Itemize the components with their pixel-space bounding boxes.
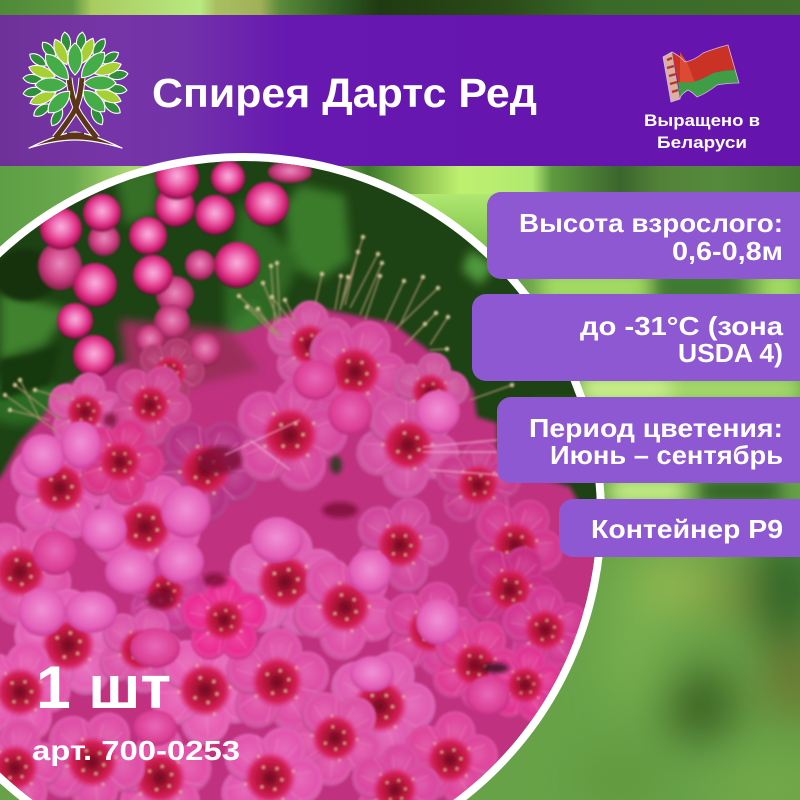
panel: flowering period: Июнь – сентябрь <box>550 440 783 470</box>
stamens <box>3 235 514 475</box>
panel: container: Контейнер Р9 <box>591 514 783 544</box>
article number: арт. 700-0253 <box>32 735 240 766</box>
buds cluster <box>38 156 312 377</box>
panel: frost hardiness <box>472 294 800 381</box>
green gap beside the circle <box>395 194 495 294</box>
open flowers <box>0 300 588 800</box>
header band <box>0 15 800 166</box>
panel: height: 0,6-0,8м <box>672 236 783 266</box>
photo circle: spirea flowers <box>0 150 610 800</box>
dark green foliage <box>0 150 610 800</box>
title: Спирея Дартс Ред <box>152 70 537 116</box>
logo: tree <box>22 31 129 148</box>
panel: flowering period: Период цветения: <box>529 413 783 443</box>
green strip under header <box>0 166 800 256</box>
tree trunk and ground <box>29 78 122 148</box>
panel: frost hardiness: до -31°С (зона <box>580 311 784 341</box>
dark gaps between flowers <box>103 413 509 673</box>
top green strip <box>0 0 800 16</box>
panel: height: Высота взрослого: <box>519 208 783 238</box>
panel: container <box>559 499 800 557</box>
pink flower mass base <box>0 307 610 800</box>
pale foreground petals <box>18 360 510 746</box>
flag caption: Выращено в <box>644 112 760 130</box>
quantity: 1 шт <box>36 654 171 721</box>
panel: frost hardiness: USDA 4) <box>678 338 783 368</box>
tree leaves <box>22 31 129 128</box>
panel: flowering period <box>497 397 800 483</box>
flag caption <box>644 112 760 152</box>
flag caption: Беларуси <box>657 134 747 152</box>
icon: Belarus flag <box>663 45 739 102</box>
panel: height <box>487 192 800 279</box>
